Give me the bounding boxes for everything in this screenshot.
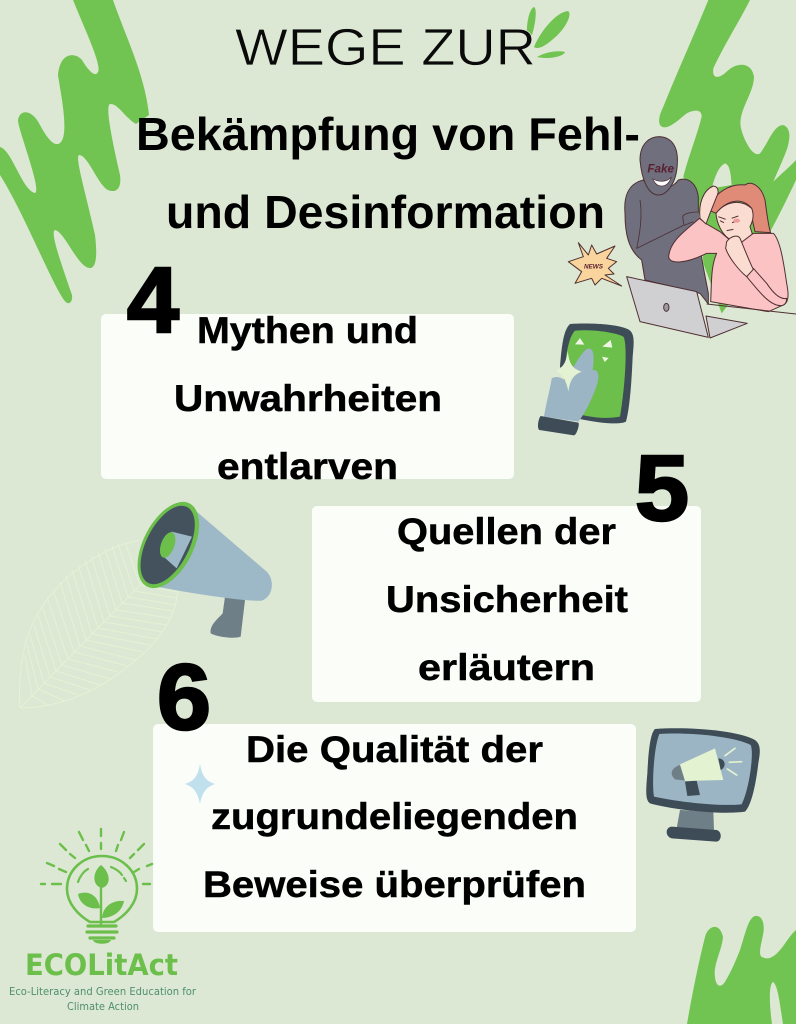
dark interior: [129, 497, 206, 593]
man body: [625, 179, 708, 304]
illustration: fake news man and worried woman at laptop: [568, 137, 796, 338]
decorative green brush shape: top left: [0, 0, 149, 303]
bulb outline: [67, 856, 137, 922]
panel: card 6: [153, 724, 636, 932]
woman hand at head: [700, 186, 718, 224]
green ring: [125, 492, 212, 598]
table line: [707, 304, 796, 314]
decorative green brush shape: top right: [659, 0, 796, 313]
heading: und Desinformation: [166, 186, 605, 238]
text: card 6: zugrundeliegenden: [211, 796, 578, 837]
laptop logo: [664, 303, 669, 311]
highlight: [78, 867, 126, 882]
screen: [653, 733, 752, 805]
woman chin arm: [747, 268, 787, 306]
megaphone handle: [685, 781, 700, 796]
text: card 4: [174, 310, 442, 487]
megaphone back: [672, 765, 685, 781]
text: card 6: [203, 729, 586, 905]
woman cheeks: [733, 219, 740, 223]
heading: [136, 108, 640, 238]
tablet body: [560, 324, 634, 423]
panel: card 5: [312, 506, 701, 702]
text: card 6: Beweise überprüfen: [203, 864, 586, 905]
text: card 5: Quellen der: [397, 511, 616, 552]
news burst: [568, 243, 622, 286]
woman hand at chin: [726, 236, 753, 277]
sparkle: [556, 351, 582, 392]
frame: [646, 728, 760, 813]
text: card 4: entlarven: [217, 446, 398, 487]
icon: small leaves behind title: [527, 7, 570, 58]
text: card 4: Unwahrheiten: [174, 378, 442, 419]
woman face: [716, 202, 753, 246]
logo wordmark: ECOLitAct: [25, 948, 178, 982]
logo: ECOLitAct: [9, 829, 196, 1013]
title: WEGE ZUR: [235, 19, 536, 77]
cone: [157, 502, 272, 601]
text: card 5: Unsicherheit: [386, 579, 628, 620]
icon: megaphone: [125, 492, 272, 638]
text: card 4: Mythen und: [197, 310, 418, 351]
icon: tablet with hand: [538, 324, 634, 435]
stand: [677, 810, 714, 830]
woman eyes and mouth: [718, 216, 738, 231]
icon: monitor with megaphone: [646, 728, 760, 842]
cuff: [538, 416, 579, 435]
woman hair: [710, 183, 771, 233]
pale leaf outline behind megaphone: [19, 540, 178, 708]
laptop screen: [627, 277, 708, 337]
rays: [41, 829, 152, 884]
sound lines: [725, 748, 742, 775]
laptop base: [706, 316, 747, 338]
megaphone cone: [680, 748, 723, 781]
number 5: 5: [635, 436, 689, 540]
heading: Bekämpfung von Fehl-: [136, 108, 640, 160]
inner green: [157, 530, 178, 560]
text: card 5: erläutern: [418, 647, 595, 688]
stem: [100, 880, 102, 925]
screen triangles: [575, 338, 612, 362]
base: [667, 827, 721, 842]
number 6: 6: [157, 645, 211, 749]
man head: [640, 137, 677, 195]
number 4: 4: [127, 248, 179, 352]
inner cone: [162, 532, 192, 568]
leaves: [94, 865, 109, 888]
text: card 5: [386, 511, 628, 688]
panel: card 4: [101, 314, 514, 479]
logo: ECOLitAct: Climate Action: [67, 1000, 139, 1013]
tablet screen: [565, 330, 626, 418]
icon: light bulb with plant: [41, 829, 152, 944]
icon: sparkle on card 6: [185, 764, 215, 804]
bulb base: [87, 926, 117, 938]
woman sweater: [669, 218, 788, 312]
man arm: [635, 212, 700, 258]
news label: NEWS: [584, 263, 604, 270]
handle: [211, 597, 245, 638]
decorative green brush shape: bottom right: [687, 916, 796, 1024]
text: card 6: Die Qualität der: [246, 729, 543, 770]
megaphone front: [718, 758, 725, 770]
hand: [544, 348, 598, 422]
man smile: [653, 177, 671, 186]
logo tagline: Eco-Literacy and Green Education for: [9, 985, 196, 998]
fake label: Fake: [647, 162, 674, 176]
